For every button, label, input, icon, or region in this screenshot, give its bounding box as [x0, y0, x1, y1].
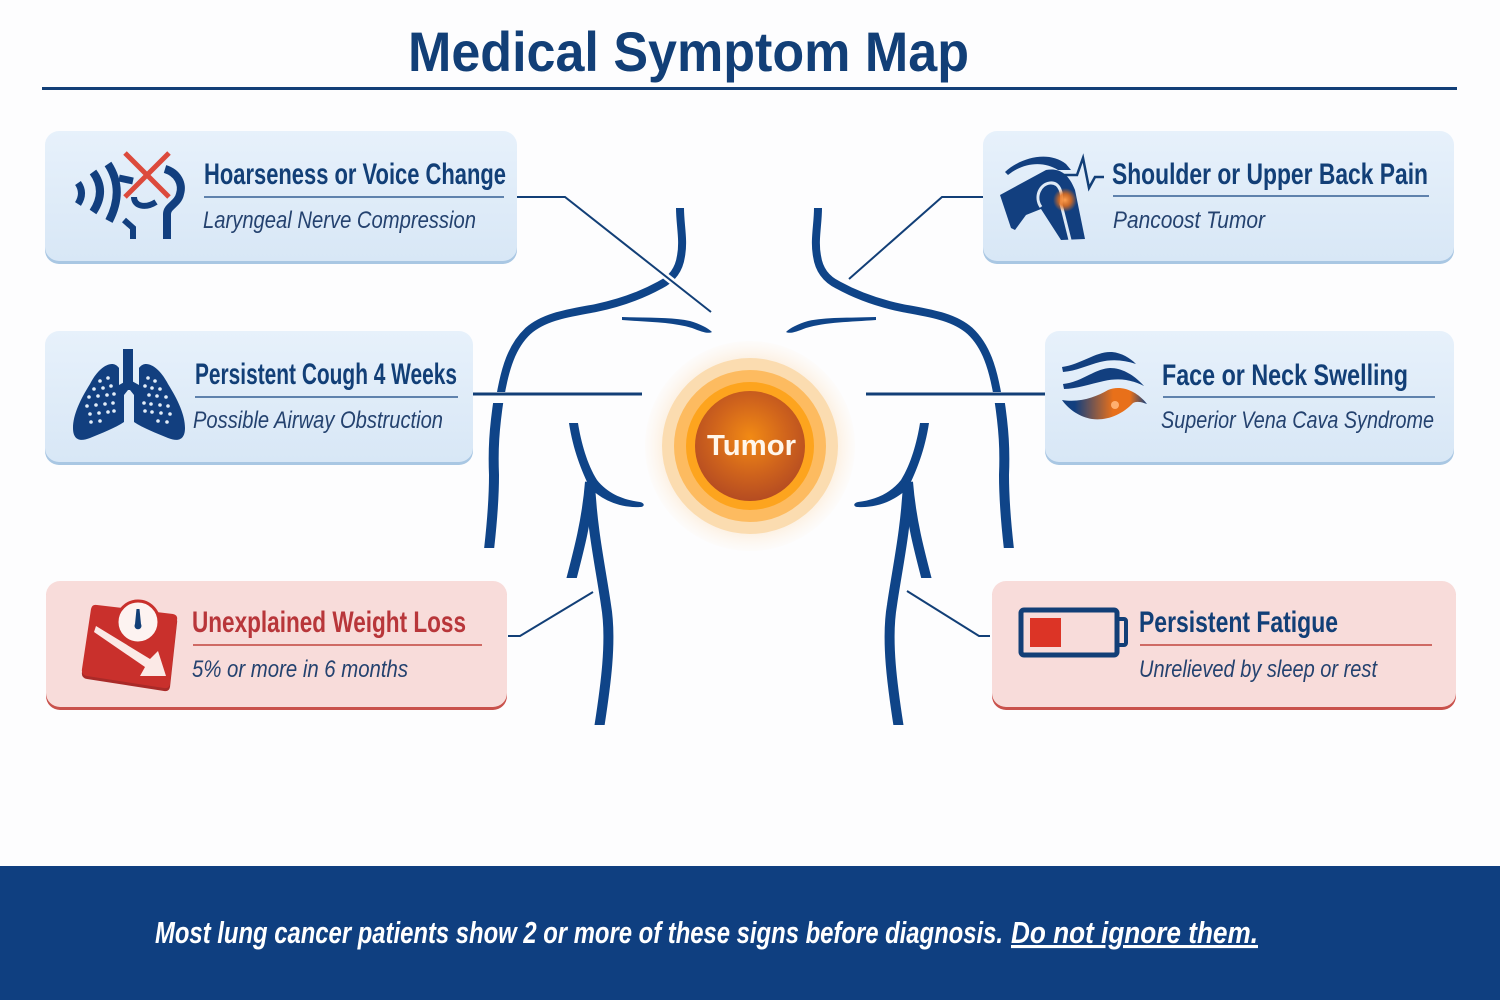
footer emphasis: Do not ignore them. — [1011, 915, 1258, 950]
body outline — [488, 208, 1010, 735]
title rule — [42, 87, 1457, 90]
subtext: Unrelieved by sleep or rest — [1139, 656, 1378, 683]
connector: cough — [473, 392, 642, 403]
tumor: Tumor — [707, 430, 796, 462]
icon: voice change — [78, 153, 181, 239]
connector: swelling — [866, 392, 1045, 403]
connector: shoulder — [849, 197, 983, 279]
subtext: Pancoost Tumor — [1113, 207, 1266, 234]
heading: Unexplained Weight Loss — [192, 606, 466, 639]
connector: weight loss — [508, 592, 593, 636]
panel: weight loss — [46, 581, 507, 710]
subtext: Possible Airway Obstruction — [193, 407, 443, 434]
heading: Persistent Fatigue — [1139, 606, 1338, 639]
panel: cough — [45, 331, 473, 465]
subtext: Superior Vena Cava Syndrome — [1161, 407, 1434, 434]
subtext: 5% or more in 6 months — [192, 656, 408, 683]
icon: shoulder pain — [1000, 157, 1104, 240]
icon: scale — [82, 601, 177, 691]
icon: swelling — [1062, 352, 1147, 419]
footer banner — [0, 866, 1500, 1000]
panel: hoarseness — [45, 131, 517, 264]
icon: battery — [1021, 610, 1126, 655]
panel: swelling — [1045, 331, 1454, 465]
panel: fatigue — [992, 581, 1456, 710]
title: Medical Symptom Map — [408, 20, 969, 83]
connector: fatigue — [907, 591, 990, 636]
icon: lungs — [73, 349, 185, 440]
heading: Hoarseness or Voice Change — [204, 158, 506, 191]
heading: Face or Neck Swelling — [1162, 359, 1408, 392]
right half of body — [786, 208, 1010, 735]
subtext: Laryngeal Nerve Compression — [203, 207, 476, 234]
footer message: Most lung cancer patients show 2 or more of these signs before diagnosis. — [155, 915, 1003, 950]
tumor — [645, 341, 855, 551]
heading: Persistent Cough 4 Weeks — [195, 358, 457, 391]
connector: hoarseness — [517, 197, 711, 312]
left half of body — [488, 208, 712, 735]
panel: shoulder — [983, 131, 1454, 264]
